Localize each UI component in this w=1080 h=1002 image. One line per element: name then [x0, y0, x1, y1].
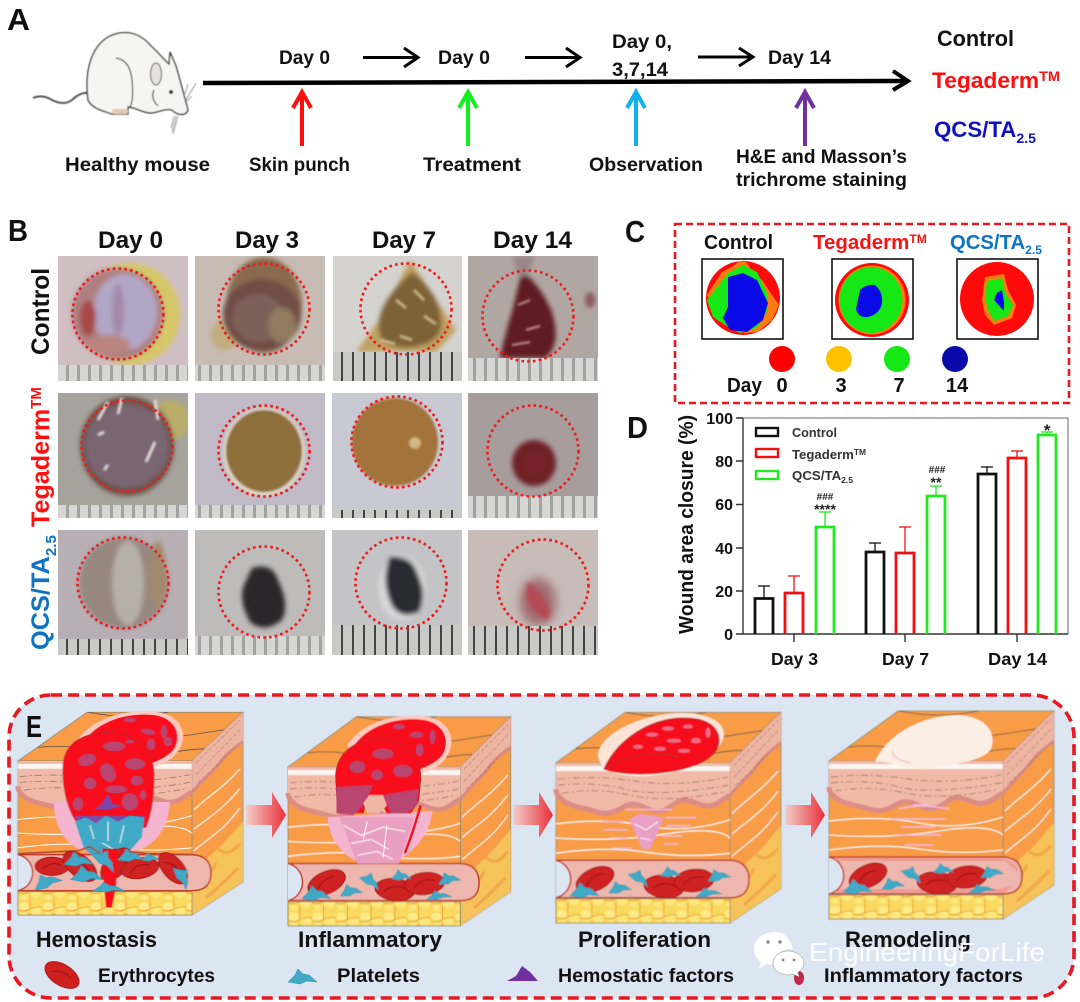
- x tick labels: Day 14: [988, 649, 1047, 669]
- y tick labels: 100: [706, 411, 733, 428]
- step captions: Treatment: [423, 154, 522, 176]
- day colour key: 14: [946, 375, 969, 397]
- black step arrows: [363, 48, 753, 67]
- stage: inflammatory: [288, 716, 511, 926]
- row headings: [27, 268, 60, 650]
- trace: control: [702, 259, 783, 339]
- photo: control day 7: [333, 256, 462, 381]
- trace titles: TM: [909, 232, 927, 246]
- legend: cell types: Platelets: [337, 966, 420, 987]
- y tick labels: 0: [724, 627, 733, 644]
- row headings: Tegaderm: [27, 409, 55, 527]
- trace titles: Control: [704, 232, 773, 254]
- photo: control day 14: [468, 256, 598, 381]
- group legend: QCS/TA: [934, 117, 1015, 142]
- stage titles: Inflammatory: [298, 927, 443, 952]
- day colour key: 3: [835, 375, 847, 397]
- group legend: 2.5: [1016, 130, 1036, 146]
- panel letter A: A: [7, 2, 30, 37]
- significance marks: **: [931, 474, 942, 490]
- stage: proliferation: [556, 703, 781, 923]
- group legend: Tegaderm: [932, 68, 1036, 93]
- day labels: Day 0,: [612, 32, 672, 53]
- y axis title: Wound area closure (%): [676, 415, 698, 634]
- trace titles: 2.5: [1025, 243, 1042, 257]
- row headings: TM: [28, 387, 45, 409]
- chart legend: Control: [792, 426, 837, 440]
- day labels: Day 14: [768, 48, 831, 69]
- row headings: Control: [27, 268, 55, 355]
- panel frame: [9, 695, 1074, 998]
- axes: [736, 418, 1068, 642]
- day labels: Day 0: [279, 48, 330, 69]
- day labels: Day 0: [438, 48, 490, 69]
- photo: control day 0: [58, 256, 188, 381]
- y tick labels: 80: [715, 454, 733, 471]
- stage titles: [36, 927, 971, 952]
- panel E: healing stages: [9, 695, 1074, 998]
- panel letter D: D: [627, 410, 648, 445]
- photo: QCS/TA day 0: [58, 530, 188, 655]
- coloured up arrows: [293, 92, 814, 146]
- trace titles: QCS/TA: [950, 232, 1024, 254]
- x tick labels: [771, 649, 1047, 669]
- column headings: Day 7: [372, 227, 436, 254]
- stage titles: Proliferation: [578, 927, 711, 952]
- group legend: TM: [1039, 68, 1060, 84]
- significance marks: [814, 421, 1051, 517]
- panel B: wound photographs: [8, 213, 598, 655]
- chart legend: [756, 426, 866, 485]
- watermark: [754, 932, 1045, 977]
- significance marks: ###: [929, 465, 946, 476]
- stage titles: Hemostasis: [36, 927, 157, 952]
- bars: QCS/TA: [816, 432, 1056, 634]
- panel A: experimental timeline: [7, 2, 1060, 191]
- column headings: [98, 227, 573, 254]
- stage: remodeling: [829, 711, 1054, 919]
- y tick labels: 40: [715, 541, 733, 558]
- x tick labels: Day 7: [882, 649, 929, 669]
- column headings: Day 14: [493, 227, 573, 254]
- day colour key: 0: [776, 375, 788, 397]
- photo: Tegaderm day 14: [468, 393, 598, 518]
- step captions: trichrome staining: [736, 169, 907, 191]
- photo: Tegaderm day 3: [195, 393, 325, 518]
- significance marks: *: [1044, 421, 1051, 440]
- trace: Tegaderm: [832, 259, 913, 339]
- stage titles: Remodeling: [845, 927, 971, 952]
- panel C: wound trace maps: [625, 214, 1069, 403]
- chart legend: TM: [854, 448, 866, 457]
- bars: Tegaderm: [785, 451, 1026, 634]
- photo: QCS/TA day 3: [195, 530, 325, 655]
- step captions: Healthy mouse: [65, 154, 210, 176]
- day colour key: 7: [893, 375, 905, 397]
- photo: QCS/TA day 14: [468, 530, 598, 655]
- day labels: 3,7,14: [612, 60, 668, 81]
- watermark: EngineeringForLife: [809, 937, 1045, 967]
- column headings: Day 0: [98, 227, 163, 254]
- chart legend: Tegaderm: [792, 448, 851, 462]
- row headings: 2.5: [43, 535, 60, 556]
- y tick labels: [706, 411, 733, 644]
- legend: cell types: Inflammatory factors: [824, 966, 1023, 987]
- panel letter E: E: [26, 709, 42, 744]
- bars: control: [755, 467, 996, 634]
- legend: cell types: Erythrocytes: [98, 966, 215, 987]
- photo: QCS/TA day 7: [332, 530, 462, 655]
- step captions: [65, 146, 907, 191]
- panel D: bar chart of wound closure: [627, 410, 1068, 669]
- x tick labels: Day 3: [771, 649, 818, 669]
- stage: hemostasis: [18, 711, 243, 915]
- column headings: Day 3: [235, 227, 299, 254]
- timeline main arrow: [203, 71, 908, 90]
- group legend: Control: [937, 26, 1014, 51]
- dashed frame: [675, 224, 1069, 403]
- y tick labels: 60: [715, 497, 733, 514]
- step captions: Skin punch: [249, 154, 350, 176]
- step captions: H&E and Masson’s: [736, 146, 907, 168]
- day colour key: Day: [727, 375, 763, 397]
- panel letter B: B: [8, 213, 28, 248]
- panel letter C: C: [625, 214, 645, 249]
- step captions: Observation: [589, 154, 703, 176]
- significance marks: ****: [814, 501, 836, 517]
- legend: cell types: [40, 956, 1023, 994]
- significance marks: ###: [817, 492, 834, 503]
- chart legend: 2.5: [841, 476, 854, 485]
- day labels: [279, 32, 831, 81]
- legend: cell types: Hemostatic factors: [558, 966, 734, 987]
- transition arrows: [246, 792, 825, 838]
- photo: control day 3: [195, 256, 325, 381]
- icon: white mouse: [33, 33, 196, 134]
- trace: QCS/TA: [957, 259, 1038, 339]
- chart legend: QCS/TA: [792, 469, 838, 483]
- day colour key: [727, 346, 969, 397]
- trace titles: [704, 232, 1042, 257]
- photo: Tegaderm day 7: [332, 393, 462, 518]
- trace titles: Tegaderm: [813, 232, 907, 254]
- row headings: QCS/TA: [27, 557, 55, 650]
- group legend: [932, 26, 1060, 146]
- photo: Tegaderm day 0: [58, 393, 188, 518]
- y tick labels: 20: [715, 584, 733, 601]
